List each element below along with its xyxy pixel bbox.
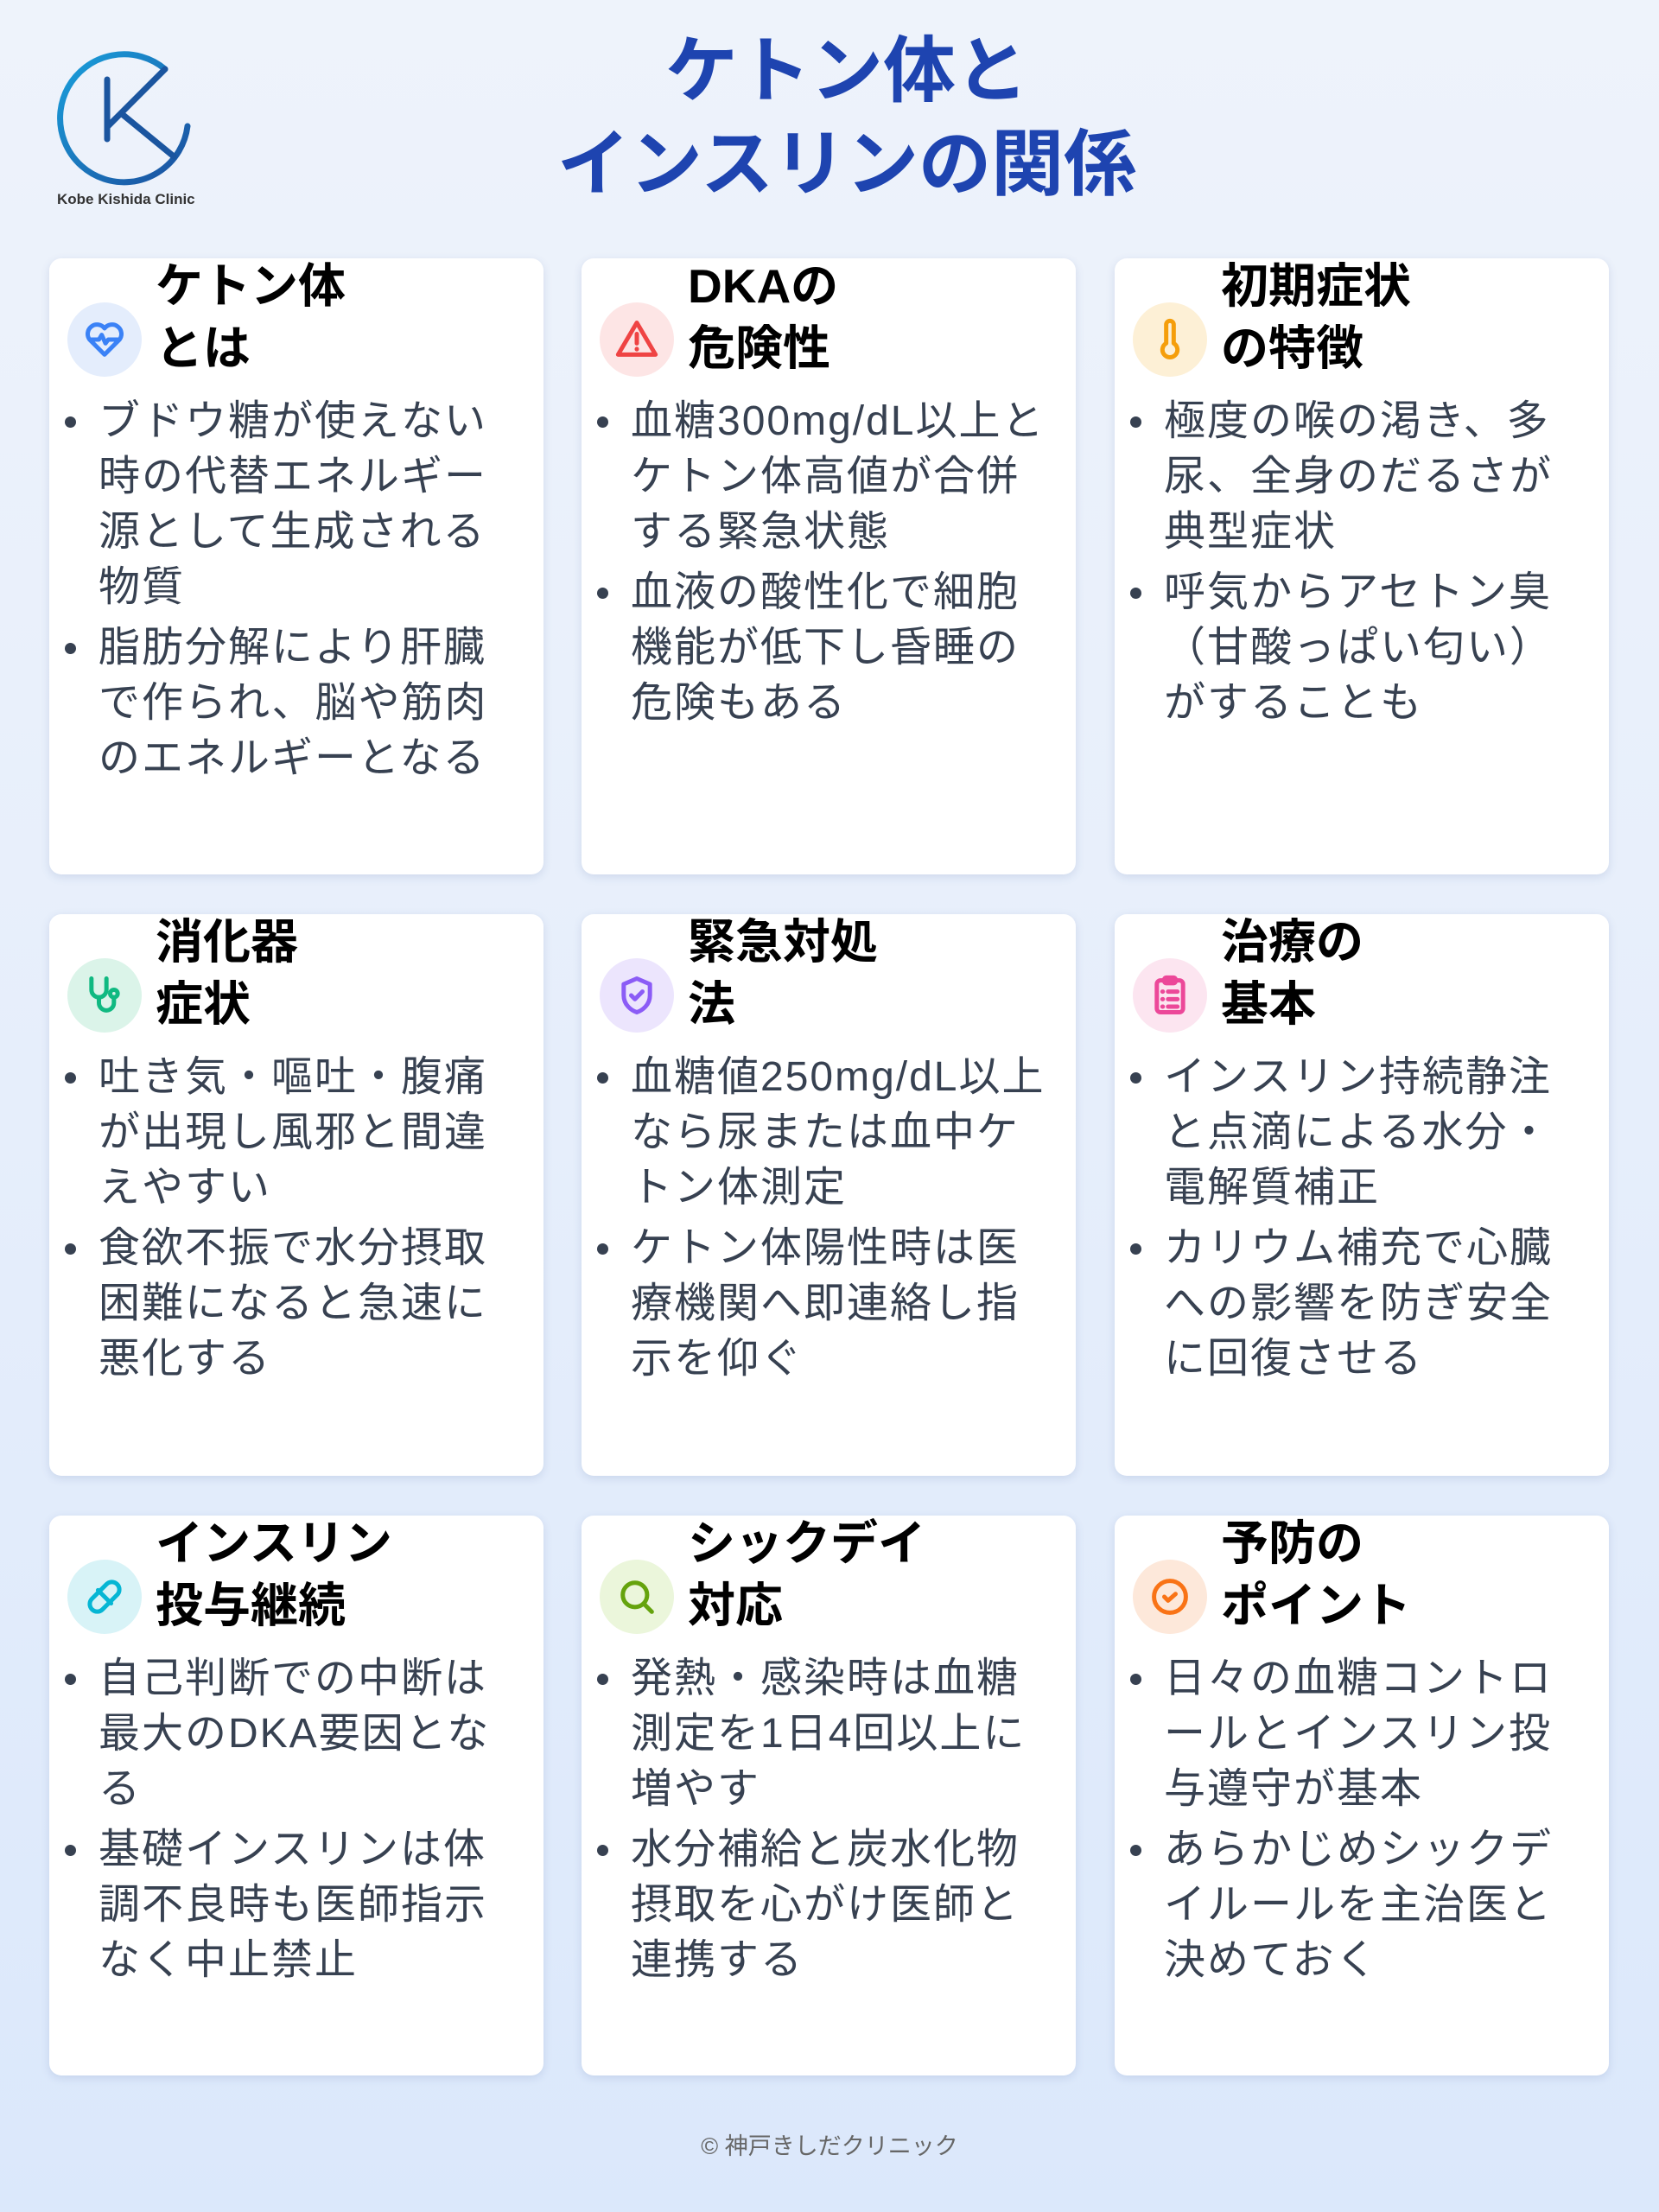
bullets: 尿、全身のだるさが <box>1164 454 1553 499</box>
heading: 症状 <box>156 977 251 1031</box>
panel: emergency response <box>582 914 1076 1476</box>
bullets <box>65 1054 487 1382</box>
logo <box>57 51 195 207</box>
heading <box>156 915 298 1031</box>
bullets: 決めておく <box>1164 1937 1379 1983</box>
icon: warning <box>600 302 674 377</box>
bullets: 増やす <box>631 1766 760 1812</box>
bullets: 調不良時も医師指示 <box>99 1882 487 1928</box>
bullets: えやすい <box>99 1165 271 1211</box>
heading <box>688 1516 925 1632</box>
heading: 消化器 <box>156 915 298 969</box>
bullets <box>597 1054 1046 1382</box>
bullets: 水分補給と炭水化物 <box>631 1827 1020 1872</box>
heading <box>1221 259 1411 375</box>
bullets: る <box>99 1766 142 1812</box>
bullets: 困難になると急速に <box>99 1281 487 1326</box>
bullets: インスリン持続静注 <box>1164 1054 1552 1100</box>
logo: Kobe Kishida Clinic <box>57 191 195 207</box>
bullets: 危険もある <box>631 680 847 726</box>
bullets: 与遵守が基本 <box>1164 1766 1423 1812</box>
bullets <box>1130 398 1553 726</box>
bullets: 呼気からアセトン臭 <box>1164 569 1552 615</box>
bullets: で作られ、脳や筋肉 <box>99 680 487 726</box>
title: ケトン体と <box>665 30 1028 111</box>
panel: prevention <box>1115 1516 1609 2075</box>
bullets: 日々の血糖コントロ <box>1164 1656 1553 1701</box>
heading: インスリン <box>156 1516 392 1570</box>
bullets: なく中止禁止 <box>99 1937 358 1983</box>
heading: 予防の <box>1221 1516 1363 1570</box>
bullets: 療機関へ即連絡し指 <box>631 1281 1020 1326</box>
bullets: 時の代替エネルギー <box>99 454 487 499</box>
heading <box>156 259 346 375</box>
bullets <box>597 398 1046 726</box>
heading: ポイント <box>1221 1579 1411 1632</box>
icon: pill <box>67 1560 142 1634</box>
bullets: への影響を防ぎ安全 <box>1164 1281 1553 1326</box>
bullets: 血糖300mg/dL以上と <box>631 398 1046 444</box>
title <box>557 30 1136 205</box>
bullets: あらかじめシックデ <box>1164 1827 1553 1872</box>
heading <box>688 259 838 375</box>
bullets: ケトン体高値が合併 <box>631 454 1020 499</box>
heading: 緊急対処 <box>688 915 878 969</box>
panel: digestive symptoms <box>49 914 543 1476</box>
heading: 法 <box>688 977 735 1031</box>
bullets: 機能が低下し昏睡の <box>631 625 1020 671</box>
bullets <box>1130 1656 1553 1983</box>
panel: ketone bodies <box>49 258 543 874</box>
heading: 治療の <box>1221 915 1363 969</box>
bullets: 基礎インスリンは体 <box>99 1827 486 1872</box>
bullets: 発熱・感染時は血糖 <box>631 1656 1020 1701</box>
icon: heart <box>67 302 142 377</box>
bullets: 自己判断での中断は <box>99 1656 487 1701</box>
bullets: カリウム補充で心臓 <box>1164 1225 1553 1271</box>
bullets: 典型症状 <box>1164 509 1337 555</box>
heading: とは <box>156 321 251 375</box>
bullets: 最大のDKA要因とな <box>99 1711 490 1757</box>
heading: シックデイ <box>688 1516 925 1570</box>
bullets: イルールを主治医と <box>1164 1882 1553 1928</box>
bullets: 食欲不振で水分摂取 <box>99 1225 487 1271</box>
bullets: がすることも <box>1164 680 1423 726</box>
bullets <box>65 398 487 781</box>
bullets: ールとインスリン投 <box>1164 1711 1552 1757</box>
bullets: なら尿または血中ケ <box>631 1109 1020 1155</box>
bullets: 吐き気・嘔吐・腹痛 <box>99 1054 487 1100</box>
bullets: （甘酸っぱい匂い） <box>1164 625 1553 671</box>
bullets: ブドウ糖が使えない <box>99 398 487 444</box>
bullets: のエネルギーとなる <box>99 735 486 781</box>
bullets: 脂肪分解により肝臓 <box>99 625 486 671</box>
bullets: 物質 <box>99 564 185 610</box>
bullets: 源として生成される <box>99 509 486 555</box>
bullets: トン体測定 <box>631 1165 847 1211</box>
heading: 基本 <box>1221 977 1316 1031</box>
bullets: 連携する <box>631 1937 804 1983</box>
heading <box>1221 1516 1411 1632</box>
heading <box>156 1516 392 1632</box>
heading: 危険性 <box>688 321 830 375</box>
bullets: 血糖値250mg/dL以上 <box>631 1054 1046 1100</box>
icon: stethoscope <box>67 958 142 1033</box>
bullets: 極度の喉の渇き、多 <box>1164 398 1550 444</box>
panel: sick day <box>582 1516 1076 2075</box>
panel: treatment basics <box>1115 914 1609 1476</box>
heading: 投与継続 <box>156 1579 346 1632</box>
bullets: 摂取を心がけ医師と <box>631 1882 1020 1928</box>
bullets <box>1130 1054 1553 1382</box>
panel: early symptoms <box>1115 258 1609 874</box>
heading <box>1221 915 1363 1031</box>
title: インスリンの関係 <box>557 124 1136 205</box>
heading: 対応 <box>688 1579 783 1632</box>
bullets <box>65 1656 490 1983</box>
icon: search <box>600 1560 674 1634</box>
heading: DKAの <box>688 259 838 313</box>
panel: continue insulin <box>49 1516 543 2075</box>
heading: 初期症状 <box>1221 259 1411 313</box>
heading: の特徴 <box>1221 321 1363 375</box>
footer: © 神戸きしだクリニック <box>701 2133 958 2159</box>
panel: DKA danger <box>582 258 1076 874</box>
icon: clipboard <box>1133 958 1207 1033</box>
bullets: ケトン体陽性時は医 <box>631 1225 1020 1271</box>
bullets: と点滴による水分・ <box>1164 1109 1552 1155</box>
bullets: 電解質補正 <box>1164 1165 1380 1211</box>
icon: thermometer <box>1133 302 1207 377</box>
bullets: 測定を1日4回以上に <box>631 1711 1026 1757</box>
bullets: する緊急状態 <box>631 509 890 555</box>
bullets: 悪化する <box>99 1336 271 1382</box>
heading: ケトン体 <box>156 259 346 313</box>
bullets: 示を仰ぐ <box>631 1336 804 1382</box>
bullets: に回復させる <box>1164 1336 1423 1382</box>
bullets: 血液の酸性化で細胞 <box>631 569 1020 615</box>
bullets <box>597 1656 1026 1983</box>
bullets: が出現し風邪と間違 <box>99 1109 487 1155</box>
heading <box>688 915 878 1031</box>
icon: shield <box>600 958 674 1033</box>
icon: check circle <box>1133 1560 1207 1634</box>
